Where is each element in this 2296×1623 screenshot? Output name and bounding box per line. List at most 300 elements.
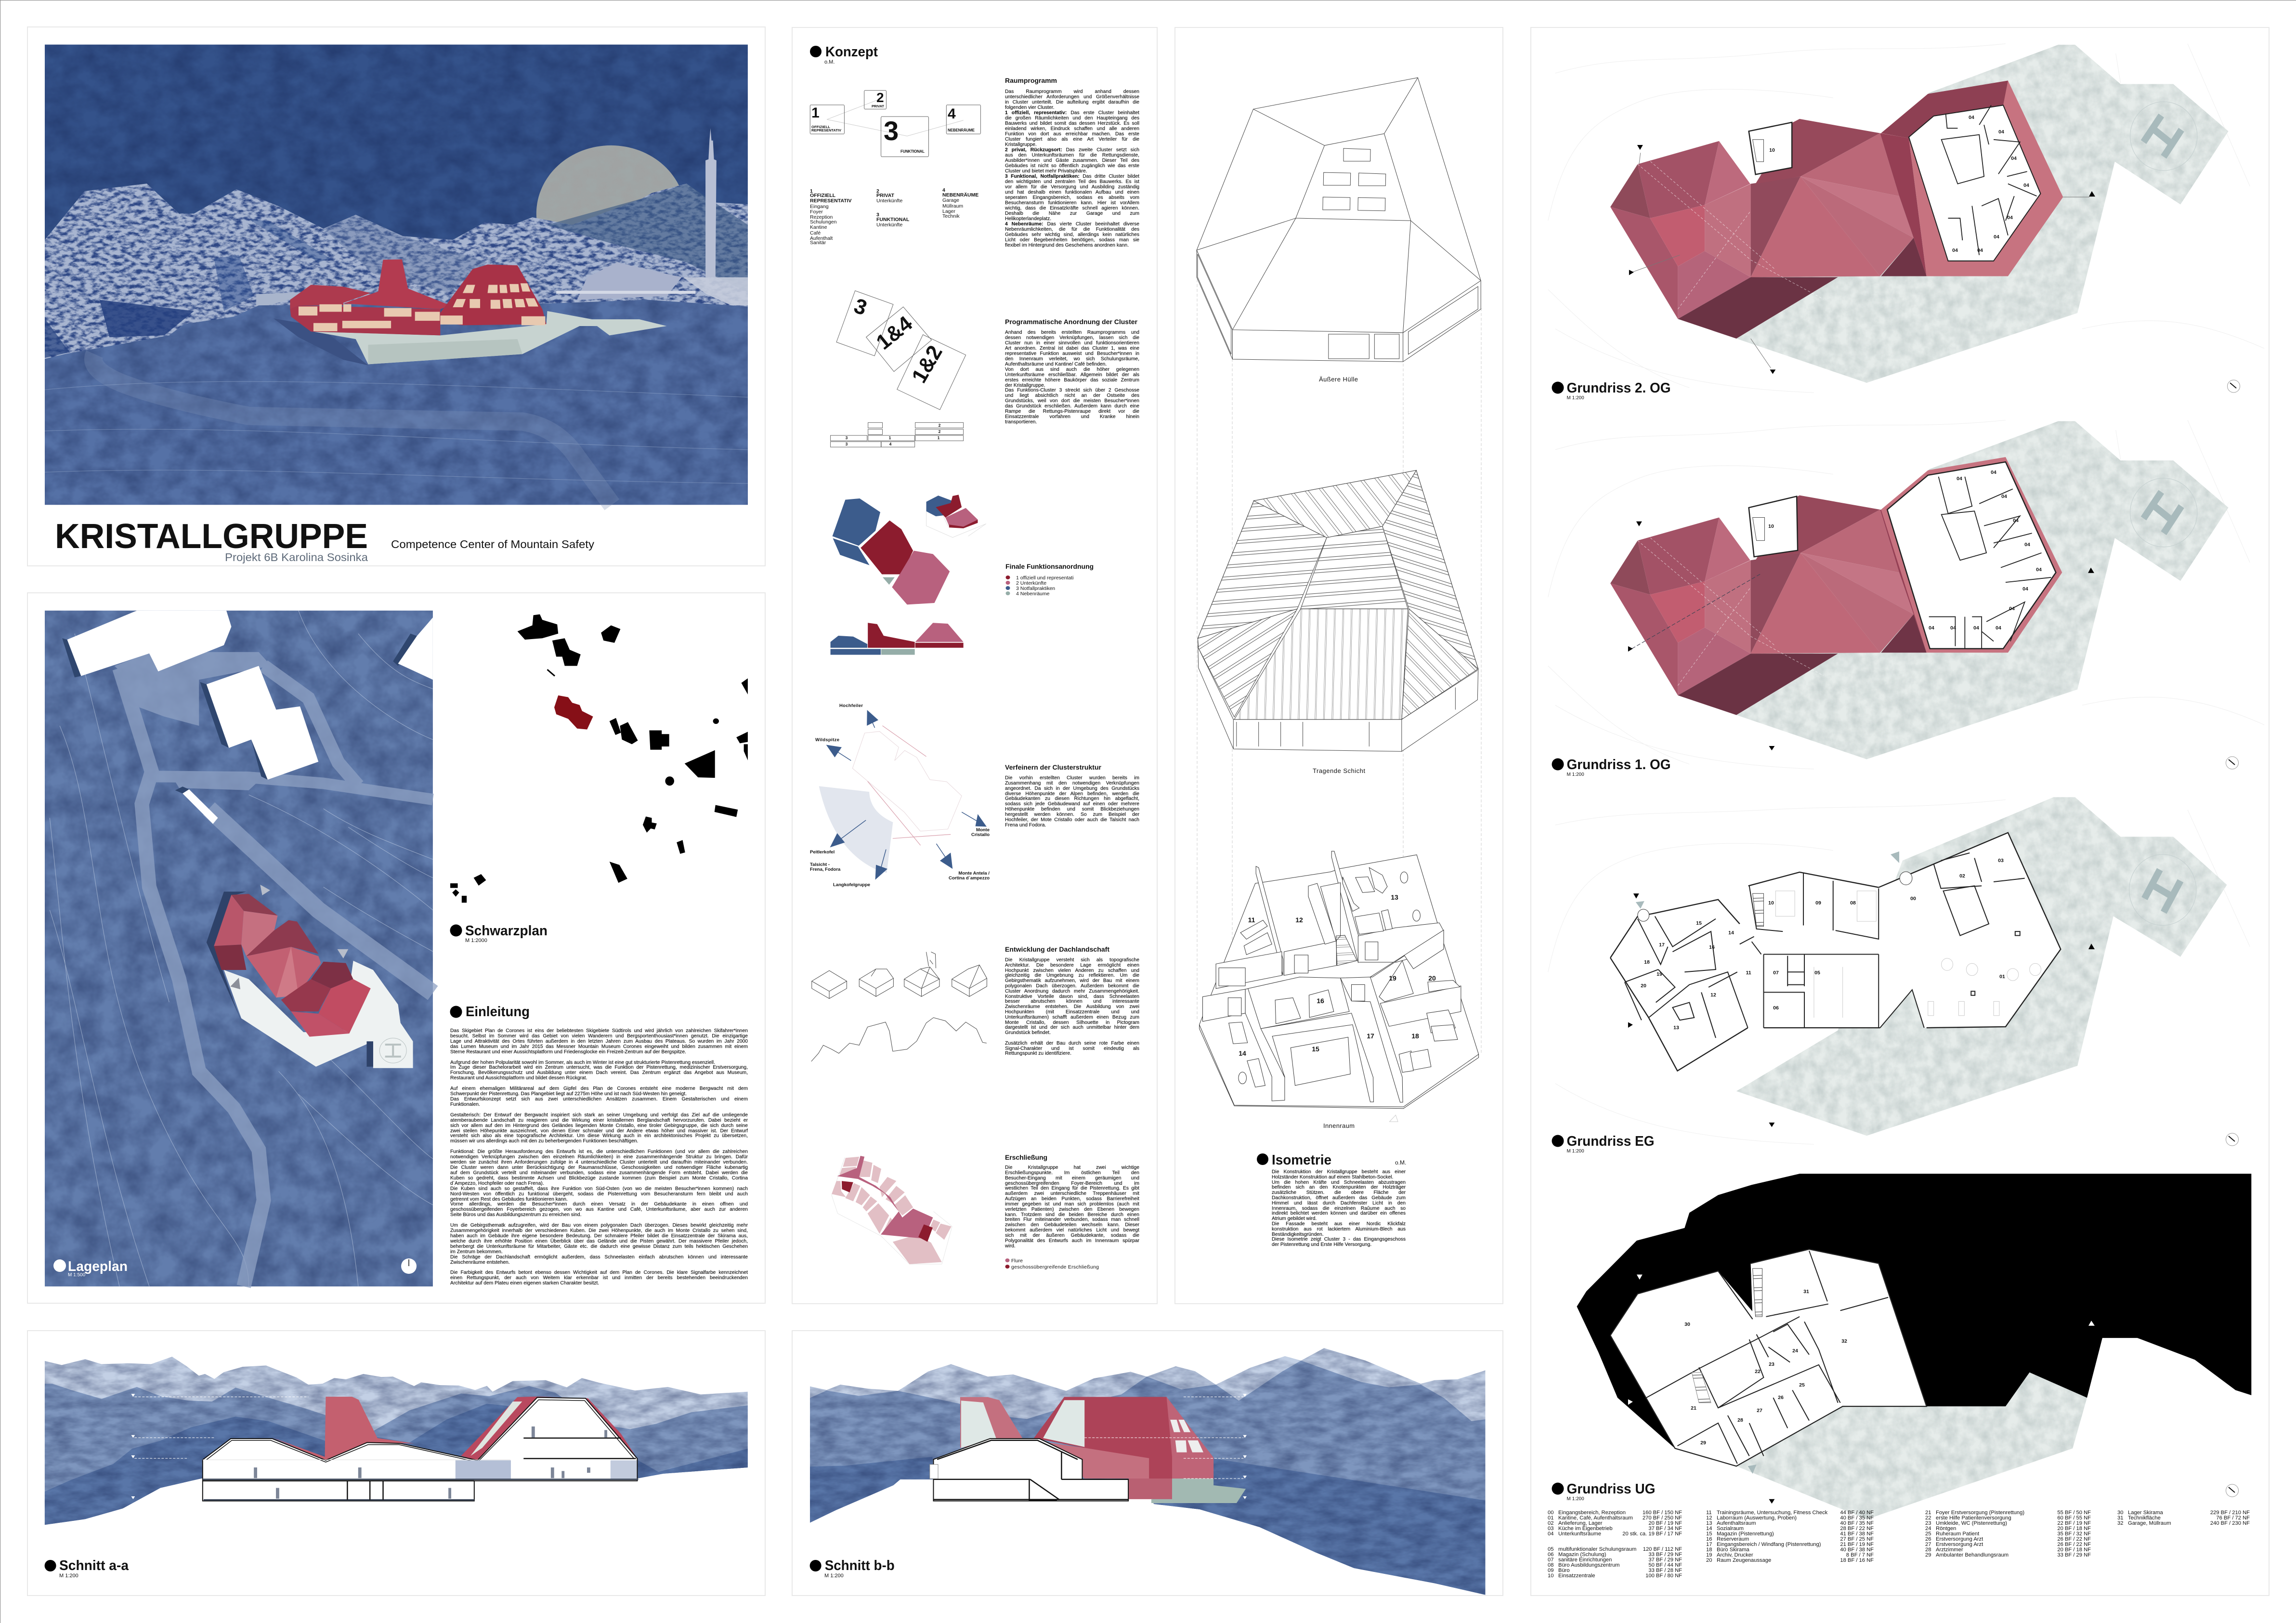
- room schedule column 3: Röntgen: [1936, 1526, 1956, 1531]
- iso: interior: [1200, 851, 1479, 1122]
- cluster arrangement text: dessen notwendigen Verknüpfungen, lassen sich die: [1005, 335, 1139, 340]
- isometric text: Die Fassade besteht aus einer Nordic Klickfalz: [1272, 1221, 1406, 1227]
- room program text: 2 privat, Rückzugsort: Das zweite Cluster setzt sich: [1005, 147, 1139, 153]
- cluster boxes diagram: 1: [811, 105, 820, 121]
- program lists: Schulungen: [810, 219, 837, 225]
- iso: interior caption: Innenraum: [1323, 1122, 1355, 1129]
- ground floor heading: M 1:200: [1567, 1149, 1584, 1154]
- interior room numbers: 14: [1239, 1049, 1246, 1057]
- panel: floor plans: [1531, 27, 2269, 1596]
- introduction text: Lage und Attraktivität des Ortes führten außerdem in den letzten Jahren zum Ausbau des Plateaus. So wurden im Jahr 2000: [450, 1039, 748, 1044]
- room schedule column 3: 20 BF / 18 NF: [2057, 1526, 2091, 1531]
- introduction text: werden sie zunächst ihren Anforderungen zufolge in 4 unterschiedliche Cluster unterteilt und daraufhin miteinander verbunden.: [450, 1160, 748, 1165]
- hero perspective image: [45, 45, 748, 505]
- basement heading: Grundriss UG: [1567, 1481, 1656, 1497]
- first floor labels: 04: [2009, 606, 2015, 612]
- room program text: die großen Räumlichkeiten und den Haupteingang des: [1005, 116, 1139, 121]
- introduction text: besucht. Selbst im Sommer wird das Gebiet von vielen Wanderern und Bergsportenthousiast*innen genutzt. Die einzigartige: [450, 1034, 748, 1039]
- ground floor heading: [1552, 1134, 1655, 1154]
- room schedule column 3: 33 BF / 29 NF: [2057, 1552, 2091, 1558]
- program lists: Garage: [942, 197, 959, 203]
- room schedule column 2: Archiv, Drucker: [1717, 1552, 1753, 1558]
- basement room numbers: 25: [1799, 1382, 1805, 1388]
- room schedule column 3: 28: [1925, 1547, 1931, 1553]
- room schedule column 2: 27 BF / 25 NF: [1840, 1536, 1874, 1542]
- cluster arrangement diagram: 1&4: [872, 312, 917, 354]
- introduction text: das Lumen Museum und im Jahr 2015 das Messner Mountain Museum Corones eingeweiht und bilden zusammen mit einem: [450, 1044, 748, 1049]
- introduction text: sich vor allem auf den im Hintergrund des Geländes liegenden Monte Cristallo, eine tiroler Gebirgsgruppe, die sich durch seine: [450, 1123, 748, 1128]
- room program text: 1 offiziell, representativ: Das erste Cluster beinhaltet: [1005, 110, 1139, 116]
- roof development text: Hochpunkt zwischen vielen Anderen zu schaffen und: [1005, 968, 1139, 973]
- section drawing b-b: [810, 1348, 1485, 1595]
- room schedule column 4: 31: [2117, 1515, 2123, 1521]
- room schedule column 3: 23: [1925, 1520, 1931, 1526]
- room program text: Nebenräumlichkeiten, die für die Funktionalität des: [1005, 227, 1139, 232]
- program lists: 4: [942, 187, 945, 193]
- room schedule column 4: Lager Skirama: [2128, 1510, 2164, 1516]
- introduction text: geschossübergeifenden Foyerbereich gezogen, von wo aus Kantine und Café, Unterkunftsräume, aber auch zur anderen: [450, 1207, 748, 1212]
- room schedule column 3: 60 BF / 55 NF: [2057, 1515, 2091, 1521]
- program lists: Sanitär: [810, 240, 826, 246]
- section b-b heading: M 1:200: [824, 1573, 844, 1579]
- room schedule column 2: 14: [1706, 1526, 1712, 1531]
- room schedule column 2: 13: [1706, 1520, 1712, 1526]
- program lists: REPRESENTATIV: [810, 198, 852, 204]
- basement room numbers: 24: [1792, 1348, 1798, 1354]
- room schedule column 4: 32: [2117, 1520, 2123, 1526]
- cluster arrangement diagram: 3: [846, 442, 848, 446]
- cluster boxes diagram: 3: [884, 116, 899, 146]
- room schedule column 2: 20: [1706, 1558, 1712, 1563]
- ground floor room numbers: 06: [1773, 1005, 1779, 1011]
- room program text: Helikopterlandeplatz.: [1005, 216, 1051, 222]
- interior room numbers: 16: [1317, 997, 1324, 1005]
- views diagram: Monte: [976, 827, 990, 833]
- ground floor room numbers: 05: [1814, 970, 1820, 976]
- refinement heading: Verfeinern der Clusterstruktur: [1005, 763, 1102, 771]
- room schedule column 4: Garage, Müllraum: [2128, 1520, 2171, 1526]
- introduction text: Nord-Westen von öffentlich zu funktional übergeht, sodass die Pistenrettung vom Besucheransturm fern bleibt und auch: [450, 1191, 748, 1197]
- circulation diagram: [832, 1156, 952, 1264]
- basement room numbers: [1684, 1289, 1847, 1446]
- roof development heading: Entwicklung der Dachlandschaft: [1005, 945, 1109, 953]
- isometric heading: Isometrie: [1272, 1152, 1331, 1168]
- basement room numbers: 27: [1757, 1408, 1762, 1414]
- room schedule column 1: [1548, 1510, 1682, 1579]
- north arrow: [2228, 380, 2240, 393]
- ground floor room numbers: 10: [1768, 900, 1774, 906]
- introduction text: einen Rettungspunkt, der auch von Weitem klar erkennbar ist und inmitten der bereits bestehenden beeindruckenden: [450, 1275, 748, 1281]
- views diagram: Cristallo: [971, 832, 990, 838]
- room schedule column 2: 18: [1706, 1547, 1712, 1553]
- ground floor room numbers: 07: [1773, 970, 1779, 976]
- second floor heading: M 1:200: [1567, 395, 1584, 401]
- introduction text: beherbergt die Unterkunftsräume für Mitarbeiter, Gäste etc. die dadurch eine gewisse Distanz zum teils hektischen Geschehen: [450, 1244, 748, 1249]
- north arrow: [2226, 757, 2238, 769]
- room schedule column 1: 50 BF / 44 NF: [1648, 1562, 1682, 1568]
- program lists: Aufenthalt: [810, 236, 833, 241]
- room schedule column 1: Büro Ausbildungszentrum: [1558, 1562, 1620, 1568]
- function layout legend: Finale Funktionsanordnung: [1005, 563, 1094, 570]
- room schedule column 3: 26 BF / 22 NF: [2057, 1542, 2091, 1547]
- section drawing a-a: [45, 1357, 748, 1525]
- room schedule column 1: 05: [1548, 1546, 1553, 1552]
- circulation legend: [1005, 1258, 1099, 1270]
- first floor labels: 04: [1996, 625, 2001, 631]
- introduction text: Auf einem ehemaligen Militärareal auf dem Gipfel des Plan de Corones entsteht eine moderne Bergwacht mit dem: [450, 1086, 748, 1091]
- room schedule column 1: 10: [1548, 1573, 1553, 1579]
- isometric text: Dachkonstruktion, öffnet außerdem das Gebäude zum: [1272, 1195, 1406, 1201]
- roof development text: polygonalen Dach überzogen. Außerdem bekommt die: [1005, 983, 1139, 989]
- program lists: 3: [876, 212, 879, 218]
- figure ground heading: Schwarzplan: [465, 923, 548, 939]
- room schedule column 4: 76 BF / 72 NF: [2216, 1515, 2250, 1521]
- basement room numbers: 26: [1778, 1395, 1784, 1400]
- cluster arrangement text: Art anordnen. Zentral ist dabei das Cluster 1, was eine: [1005, 346, 1139, 351]
- cluster arrangement text: Anhand des bereits erstellten Raumprogramms und: [1005, 330, 1139, 335]
- views diagram: Wildspitze: [815, 737, 839, 743]
- second floor labels: 04: [2007, 215, 2013, 221]
- isometric heading: o.M.: [1395, 1159, 1406, 1166]
- introduction text: Architektur auf dem Plateu einen eigenen starken Charakter besitzt.: [450, 1281, 599, 1286]
- room schedule column 3: Ambulanter Behandlungsraum: [1936, 1552, 2009, 1558]
- roof development text: Zwischenräume entstehen. Die Ausbildung von zwei: [1005, 1004, 1139, 1009]
- room schedule column 2: Magazin (Pistenrettung): [1717, 1531, 1774, 1537]
- room schedule column 3: 29: [1925, 1552, 1931, 1558]
- introduction text: welche durch ihre erhöhte Position einen Überblick über das Gelände und die Pisten gewährt. Der massivere Pfeiler jedoch,: [450, 1239, 748, 1244]
- first floor labels: 04: [1957, 476, 1962, 482]
- room schedule column 4: 240 BF / 230 NF: [2210, 1520, 2250, 1526]
- room schedule column 2: 40 BF / 35 NF: [1840, 1515, 1874, 1521]
- introduction text: Zusammengehörigkeit innerhalb der verschiedenen Kuben. Die zwei Höhenpunkte, die auch im Monte Cristallo zu sehen sind,: [450, 1228, 748, 1233]
- room schedule column 2: 15: [1706, 1531, 1712, 1537]
- floor plan first floor: [1548, 420, 2264, 769]
- program lists: Foyer: [810, 209, 823, 215]
- room schedule column 2: Büro Skirama: [1717, 1547, 1750, 1553]
- program lists: Kantine: [810, 224, 827, 230]
- panel: concept: [792, 27, 1157, 1304]
- room schedule column 2: Sozialraum: [1717, 1526, 1744, 1531]
- refinement text: sodass sich jede Gebäudewand auf einen oder mehrere: [1005, 801, 1139, 807]
- introduction text: versteht sich also als eine topografische Architektur. Um diese Wirkung auch in ein architektonisches Projekt zu übersetzen,: [450, 1133, 748, 1139]
- room schedule column 2: 28 BF / 22 NF: [1840, 1526, 1874, 1531]
- circulation legend: Flure: [1011, 1258, 1023, 1264]
- room schedule column 4: [2117, 1510, 2250, 1526]
- north arrow: [2226, 1133, 2238, 1146]
- cluster boxes diagram: 4: [948, 106, 956, 122]
- room schedule column 1: Unterkunftsräume: [1558, 1531, 1601, 1537]
- room program text: und hat deshalb einen funktionalen Aufbau und einen: [1005, 190, 1139, 195]
- basement room numbers: 23: [1769, 1361, 1774, 1367]
- site plan heading: M 1:500: [68, 1272, 86, 1278]
- second floor labels: 10: [1769, 147, 1775, 153]
- ground floor room numbers: 14: [1728, 930, 1734, 936]
- room schedule column 1: sanitäre Einrichtungen: [1558, 1557, 1612, 1563]
- first floor heading: M 1:200: [1567, 772, 1584, 777]
- room schedule column 1: Einsatzzentrale: [1558, 1573, 1595, 1579]
- concept heading: o.M.: [824, 59, 835, 65]
- room schedule column 3: 25: [1925, 1531, 1931, 1537]
- section a-a heading: Schnitt a-a: [59, 1558, 129, 1573]
- program lists: Café: [810, 230, 821, 236]
- room schedule column 1: 37 BF / 34 NF: [1648, 1526, 1682, 1531]
- room schedule column 3: Arztzimmer: [1936, 1547, 1963, 1553]
- ground floor room numbers: 11: [1746, 970, 1751, 976]
- dashed projection lines: [1197, 279, 1481, 1055]
- room schedule column 3: 27: [1925, 1542, 1931, 1547]
- second floor labels: 04: [1969, 115, 1974, 120]
- room schedule column 1: 33 BF / 28 NF: [1648, 1568, 1682, 1573]
- first floor labels: 04: [1929, 625, 1934, 631]
- room schedule column 1: 270 BF / 250 NF: [1643, 1515, 1682, 1521]
- room schedule column 3: erste Hilfe Patientenversorgung: [1936, 1515, 2011, 1521]
- room schedule column 1: 07: [1548, 1557, 1553, 1563]
- views diagram: Monte Antela /: [958, 871, 990, 876]
- room program text: einladend wirken, Eindruck schaffen und alle anderen: [1005, 126, 1139, 131]
- function layout diagram: [831, 495, 986, 655]
- room program text: Gebäudes sehr wichtig sind, allerdings kein natürliches: [1005, 232, 1139, 237]
- ground floor room numbers: 09: [1815, 900, 1821, 906]
- program lists: Unterkünfte: [876, 198, 902, 204]
- refinement text: Gebäudekanten zu diesen Richtungen hin abgeflacht,: [1005, 796, 1139, 801]
- circulation legend: geschossübergreifende Erschließung: [1011, 1264, 1099, 1270]
- ground floor room numbers: 13: [1673, 1025, 1679, 1031]
- function layout legend: [1005, 563, 1094, 597]
- room schedule column 4: Technikfläche: [2128, 1515, 2161, 1521]
- isometric text: befinden sich an den Knotenpunkten der Holzträger: [1272, 1185, 1406, 1190]
- room schedule column 1: 33 BF / 29 NF: [1648, 1552, 1682, 1558]
- second floor labels: 04: [1994, 234, 1999, 240]
- iso: outer shell caption: Äußere Hülle: [1319, 376, 1358, 383]
- section b-b heading: Schnitt b-b: [825, 1558, 895, 1573]
- isometric text: der Pistenrettung und Erste Hilfe Versorgung.: [1272, 1242, 1371, 1247]
- ground floor room numbers: 16: [1709, 944, 1715, 950]
- room schedule column 2: 19: [1706, 1552, 1712, 1558]
- cluster arrangement diagram: 4: [889, 442, 892, 446]
- interior room numbers: 18: [1411, 1032, 1419, 1040]
- refinement text: angeordnet. Da sich in der Umgebung des Grundstücks: [1005, 786, 1139, 791]
- introduction text: Die Cluster weren dann unter Berücksichtigung der Raumanschlüsse, Geschossigkeiten und notwendiger Fläche kubenartig: [450, 1165, 748, 1170]
- room schedule column 1: Küche im Eigenbetrieb: [1558, 1526, 1613, 1531]
- program lists: Rezeption: [810, 214, 833, 220]
- room program text: folgenden vier Cluster.: [1005, 105, 1054, 110]
- first floor heading: Grundriss 1. OG: [1567, 757, 1671, 772]
- roof development text: Rettungspunkt zu identifiziere.: [1005, 1051, 1071, 1056]
- floor plan basement: [1577, 1174, 2251, 1519]
- basement room numbers: 28: [1737, 1417, 1743, 1423]
- first floor labels: 04: [1973, 625, 1979, 631]
- first floor labels: 04: [2022, 586, 2028, 592]
- refinement text: Hochfeiler, der Mote Cristallo oder auch die Talsicht nach: [1005, 817, 1139, 823]
- roof development drawings: [811, 952, 987, 1061]
- room schedule column 1: 120 BF / 112 NF: [1643, 1546, 1682, 1552]
- ground floor room numbers: 17: [1659, 942, 1665, 948]
- cluster arrangement diagram: 1: [938, 435, 940, 440]
- refinement text: Höhenpunkte befinden und somit Blickbeziehungen: [1005, 807, 1139, 812]
- room program text: Deshalb die Nähe zur Garage und zum: [1005, 211, 1139, 216]
- introduction text: Forschung, Bevölkerungsschutz und Ausbildung unter einem Dach vereint. Das Zentrum ergänzt das Angebot aus Museum,: [450, 1070, 748, 1075]
- introduction text: d´Ampezzo, Hochpfeiler oder nach Frena).: [450, 1181, 544, 1186]
- cluster arrangement text: [1005, 330, 1139, 425]
- cluster arrangement heading: Programmatische Anordnung der Cluster: [1005, 318, 1138, 326]
- first floor labels: 10: [1768, 524, 1774, 529]
- isometric text: Himmel und lässt durch Dachfenster Licht in den: [1272, 1201, 1406, 1206]
- ground floor room numbers: 03: [1998, 858, 2004, 864]
- roof development text: Signal-Charakter und ist somit eindeutig als: [1005, 1046, 1139, 1051]
- introduction text: Aufgrund der hohen Polpularität sowohl im Sommer, als auch im Winter ist eine gut strukturierte Pistenrettung essenziell.: [450, 1060, 715, 1065]
- function layout legend: 4 Nebenräume: [1016, 591, 1050, 597]
- program lists: 1: [810, 188, 813, 194]
- room program text: Besucheransturm funktionieren kann. Hier ist vorAllem: [1005, 200, 1139, 206]
- room schedule column 3: 22 BF / 19 NF: [2057, 1520, 2091, 1526]
- ground floor room numbers: 01: [1999, 974, 2005, 980]
- first floor labels: 04: [2001, 494, 2007, 499]
- room schedule column 2: 40 BF / 38 NF: [1840, 1547, 1874, 1553]
- room schedule column 4: 229 BF / 210 NF: [2210, 1510, 2250, 1516]
- introduction text: Sterne Restaurant und einer Aussichtsplatform und Friedensglocke ein Freizeit-Zentrum auf der Bergspitze.: [450, 1049, 686, 1055]
- views diagram: [810, 703, 990, 888]
- cluster arrangement text: transportieren.: [1005, 419, 1037, 425]
- site plan heading: Lageplan: [68, 1259, 128, 1274]
- circulation text: verletzten Patienten) zwischen den Ebenen bewegen: [1005, 1207, 1139, 1212]
- room program text: Cluster und bietet mehr Privatsphäre.: [1005, 169, 1087, 174]
- introduction text: Funktionalen.: [450, 1102, 480, 1107]
- introduction text: Vorne allerdings, werden die Besucher*innen durch einen Versatz in der Gebäudekante in einen offnen und: [450, 1202, 748, 1207]
- program lists: Eingang: [810, 204, 829, 209]
- second floor labels: 04: [1977, 248, 1983, 253]
- introduction text: getrennt vom Rest des Gebäudes funktionieren kann.: [450, 1196, 568, 1202]
- interior room numbers: [1239, 893, 1436, 1057]
- room schedule column 1: Büro: [1558, 1568, 1570, 1573]
- roof development text: Die Kristallgruppe versteht sich als topografische: [1005, 957, 1139, 963]
- room schedule column 1: 02: [1548, 1520, 1553, 1526]
- room schedule column 3: [1925, 1510, 2091, 1558]
- cluster arrangement diagram: 2: [939, 423, 941, 428]
- room schedule column 2: Trainingsräume, Untersuchung, Fitness Check: [1717, 1510, 1828, 1516]
- function layout legend: 3 Notfallpraktiken: [1016, 586, 1055, 591]
- circulation text: bekommt außerdem viel natürliches Licht und bewegt: [1005, 1228, 1139, 1233]
- basement room numbers: 32: [1841, 1338, 1847, 1344]
- roof development text: besser abrutschen können und interessante: [1005, 999, 1139, 1004]
- room schedule column 1: 06: [1548, 1552, 1553, 1558]
- cluster arrangement text: Rampe die Rettungs-Pistenraupe direkt vor die: [1005, 409, 1139, 414]
- site plan heading: [53, 1259, 128, 1278]
- room schedule column 2: 40 BF / 35 NF: [1840, 1520, 1874, 1526]
- north arrow site plan: [401, 1258, 417, 1274]
- room schedule column 1: 00: [1548, 1510, 1553, 1516]
- circulation text: Erschließungspunkte. Im östlichen Teil den: [1005, 1170, 1139, 1176]
- second floor labels: 04: [1998, 129, 2004, 135]
- iso: outer shell: [1197, 78, 1481, 362]
- figure ground plan: [450, 614, 748, 903]
- panel: site plan and introduction: [27, 593, 765, 1303]
- first floor labels: 04: [2013, 518, 2019, 524]
- circulation text: immer gegeben ist und man sich problemlos (auch mit: [1005, 1202, 1139, 1207]
- isometric heading: [1257, 1152, 1406, 1168]
- introduction text: Die Kuben sind auch so gestaffelt, dass ihre Funktion von Süd-Osten (von wo die meisten Besucher*innen kommen) nach: [450, 1186, 748, 1191]
- room schedule column 1: 09: [1548, 1568, 1553, 1573]
- isometric text: konstruktion aus rot lackiertem Aluminium-Blech aus: [1272, 1227, 1406, 1232]
- program lists: PRIVAT: [876, 193, 895, 198]
- ground floor room numbers: 12: [1710, 992, 1716, 998]
- circulation text: außerdem zwei unterschiedliche Treppenhäuser mit: [1005, 1191, 1139, 1196]
- cluster boxes diagram: 2: [876, 90, 884, 105]
- room schedule column 1: 100 BF / 80 NF: [1645, 1573, 1682, 1579]
- program lists: Lager: [942, 209, 955, 214]
- introduction text: Kuben so gedreht, dass bestimmte Achsen und Blickbezüge zustande kommen (zum Beispiel zum Monte Cristallo, Cortina: [450, 1176, 748, 1181]
- program lists: 2: [876, 188, 879, 194]
- ground floor heading: Grundriss EG: [1567, 1134, 1655, 1149]
- introduction text: müssen wir uns allerdings auch mit den zu beherbergenden Funktionen beschäftigen.: [450, 1139, 638, 1144]
- room schedule column 1: 03: [1548, 1526, 1553, 1531]
- isometric text: [1272, 1170, 1406, 1248]
- section a-a heading: M 1:200: [59, 1573, 78, 1579]
- floor plan ground floor: [1548, 797, 2250, 1144]
- circulation text: geschossübergreifenden Foyer-Bereich und im: [1005, 1181, 1139, 1186]
- basement heading: M 1:200: [1567, 1496, 1584, 1502]
- interior room numbers: 17: [1367, 1032, 1374, 1040]
- room schedule column 2: Aufenthaltsraum: [1717, 1520, 1756, 1526]
- cluster arrangement text: Grundstücks, weil von dort die meisten Besucher*innen: [1005, 398, 1139, 404]
- views diagram: Langkofelgruppe: [833, 882, 870, 888]
- second floor labels: 04: [2023, 183, 2029, 188]
- isometric text: Innenraum, sodass die einzelnen Raûume auch so: [1272, 1206, 1406, 1211]
- circulation text: kann. Trotzdem sind die beiden Bereiche durch einen: [1005, 1212, 1139, 1217]
- room schedule column 3: 24: [1925, 1526, 1931, 1531]
- room schedule column 2: Reserveraum: [1717, 1536, 1749, 1542]
- cluster arrangement text: Cluster nun in einer sinnvollen und funktionsorientieren: [1005, 340, 1139, 346]
- introduction text: Die Schräge der Dachlandschaft ermöglicht außerdem, dass Schneelasten einfach abrutschen können und interessante: [450, 1255, 748, 1260]
- basement room numbers: 31: [1803, 1289, 1809, 1295]
- ground floor room numbers: 02: [1959, 873, 1965, 879]
- room schedule column 3: Foyer Erstversorgung (Pistenrettung): [1936, 1510, 2024, 1516]
- room program text: Bauwerks und bildet somit das dessen Herzstück. Es soll: [1005, 121, 1139, 126]
- isometric text: Atrium gebildet wird.: [1272, 1216, 1317, 1221]
- first floor labels: 04: [1950, 625, 1956, 631]
- views diagram: Frena, Fodora: [810, 867, 841, 872]
- views diagram: Hochfeiler: [839, 703, 863, 708]
- function layout legend: 1 offiziell und representati: [1016, 575, 1073, 581]
- program lists: NEBENRÄUME: [942, 192, 978, 198]
- room schedule column 3: 20 BF / 18 NF: [2057, 1547, 2091, 1553]
- room program text: Funktion von dort aus erreichbar machen. Das erste: [1005, 131, 1139, 137]
- roof development text: gleichzeitig die Umgebnung zu reflektieren. Um die: [1005, 973, 1139, 978]
- cluster boxes diagram: REPRESENTATIV: [811, 128, 841, 132]
- views diagram: Talsicht -: [810, 862, 830, 867]
- roof development text: dargestellt ist und der sich auch unmittelbar hinter dem: [1005, 1025, 1139, 1030]
- room program text: vor allem für die Versorgung und Ausbilding zuständig: [1005, 184, 1139, 190]
- second floor labels: [1769, 115, 2029, 253]
- cluster arrangement text: Aufenthaltsräume und Kantine/ Café befinden.: [1005, 362, 1107, 367]
- panel: isometric: [1175, 27, 1503, 1304]
- floor plan second floor: [1548, 44, 2264, 393]
- iso: load bearing structure: [1198, 471, 1478, 751]
- refinement text: Zusammenhang mit den notwendigen Verknüpfungen: [1005, 781, 1139, 786]
- interior room numbers: 15: [1312, 1045, 1319, 1053]
- first floor labels: 04: [2036, 567, 2042, 573]
- introduction text: Die Farbigkeit des Entwurfs betont ebenso dessen Wichtigkeit auf dem Plan de Corones. Die klare Signalfarbe kennzeichnet: [450, 1270, 748, 1275]
- introduction text: Funktional: Die größte Herausforderung des Entwurfs ist es, die unterschiedlichen Funktionen (und vor allem die zahlreichen: [450, 1149, 748, 1154]
- isometric text: Holzständer Konstruktion auf einem Stahlbeton-Sockel.: [1272, 1175, 1393, 1180]
- circulation text: Die Kristallgruppe hat zwei wichtige: [1005, 1165, 1139, 1170]
- cluster arrangement text: Von dort aus sind auch die höher gelegenen: [1005, 367, 1139, 372]
- room schedule column 2: Eingangsbereich / Windfang (Pistenrettung): [1717, 1542, 1821, 1547]
- panel: hero title: [27, 27, 765, 566]
- cluster boxes diagram: FUNKTIONAL: [900, 149, 925, 154]
- room schedule column 2: 44 BF / 40 NF: [1840, 1510, 1874, 1516]
- room schedule column 3: 55 BF / 50 NF: [2057, 1510, 2091, 1516]
- iso: structure caption: Tragende Schicht: [1313, 767, 1365, 774]
